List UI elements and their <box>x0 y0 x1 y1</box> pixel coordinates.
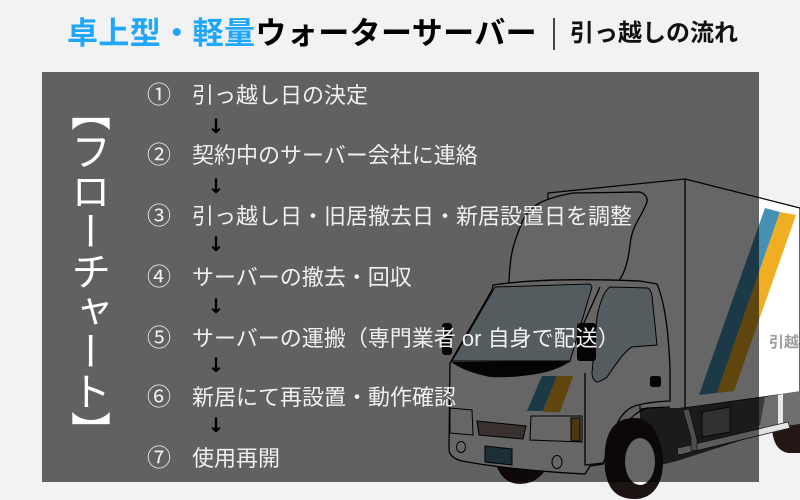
fender line <box>606 407 670 465</box>
chassis <box>640 391 800 470</box>
step 1 text: 引っ越し日の決定 <box>192 83 368 108</box>
headlights <box>450 408 582 442</box>
step 2 number: ② <box>147 142 171 169</box>
step 4 text: サーバーの撤去・回収 <box>192 265 412 290</box>
step 3 number: ③ <box>147 203 171 230</box>
step 3 text: 引っ越し日・旧居撤去日・新居設置日を調整 <box>192 204 632 229</box>
arrow 5: ↓ <box>208 353 224 377</box>
arrow 6: ↓ <box>208 413 224 437</box>
step 7 number: ⑦ <box>147 445 171 472</box>
panel: flowchart overlay <box>42 72 759 482</box>
cab body <box>449 280 670 474</box>
step 2 text: 契約中のサーバー会社に連絡 <box>192 143 478 168</box>
arrow 2: ↓ <box>208 174 224 198</box>
arrow 3: ↓ <box>208 232 224 256</box>
title divider <box>553 18 554 50</box>
box logo text: 引越 <box>769 334 799 351</box>
cab stripes <box>527 376 573 412</box>
grille <box>477 421 526 439</box>
rear wheel <box>772 420 800 453</box>
step 5 number: ⑤ <box>147 325 171 352</box>
fog lights <box>456 442 562 468</box>
subtitle: 引っ越しの流れ <box>570 20 738 47</box>
step 6 text: 新居にて再設置・動作確認 <box>192 385 456 410</box>
front wheel <box>605 418 663 499</box>
arrow 1: ↓ <box>208 114 224 138</box>
step 5 text: サーバーの運搬（専門業者 or 自身で配送） <box>192 326 620 351</box>
step 4 number: ④ <box>147 264 171 291</box>
step 1 number: ① <box>147 82 171 109</box>
license plate <box>485 446 512 465</box>
side mirrors <box>442 323 596 361</box>
step 7 text: 使用再開 <box>192 446 280 471</box>
front under wheel <box>495 462 550 484</box>
door handle <box>650 376 661 387</box>
door outline <box>583 287 603 465</box>
windshield <box>452 284 592 361</box>
arrow 4: ↓ <box>208 294 224 318</box>
box stripes <box>699 208 796 395</box>
air deflector <box>509 192 647 283</box>
under-windshield strip <box>451 361 571 377</box>
title: 卓上型・軽量ウォーターサーバー <box>67 16 537 51</box>
step 6 number: ⑥ <box>147 384 171 411</box>
side window <box>592 287 657 382</box>
cargo box <box>548 179 800 412</box>
panel heading: flowchart: 【フローチャート】 <box>65 91 109 451</box>
